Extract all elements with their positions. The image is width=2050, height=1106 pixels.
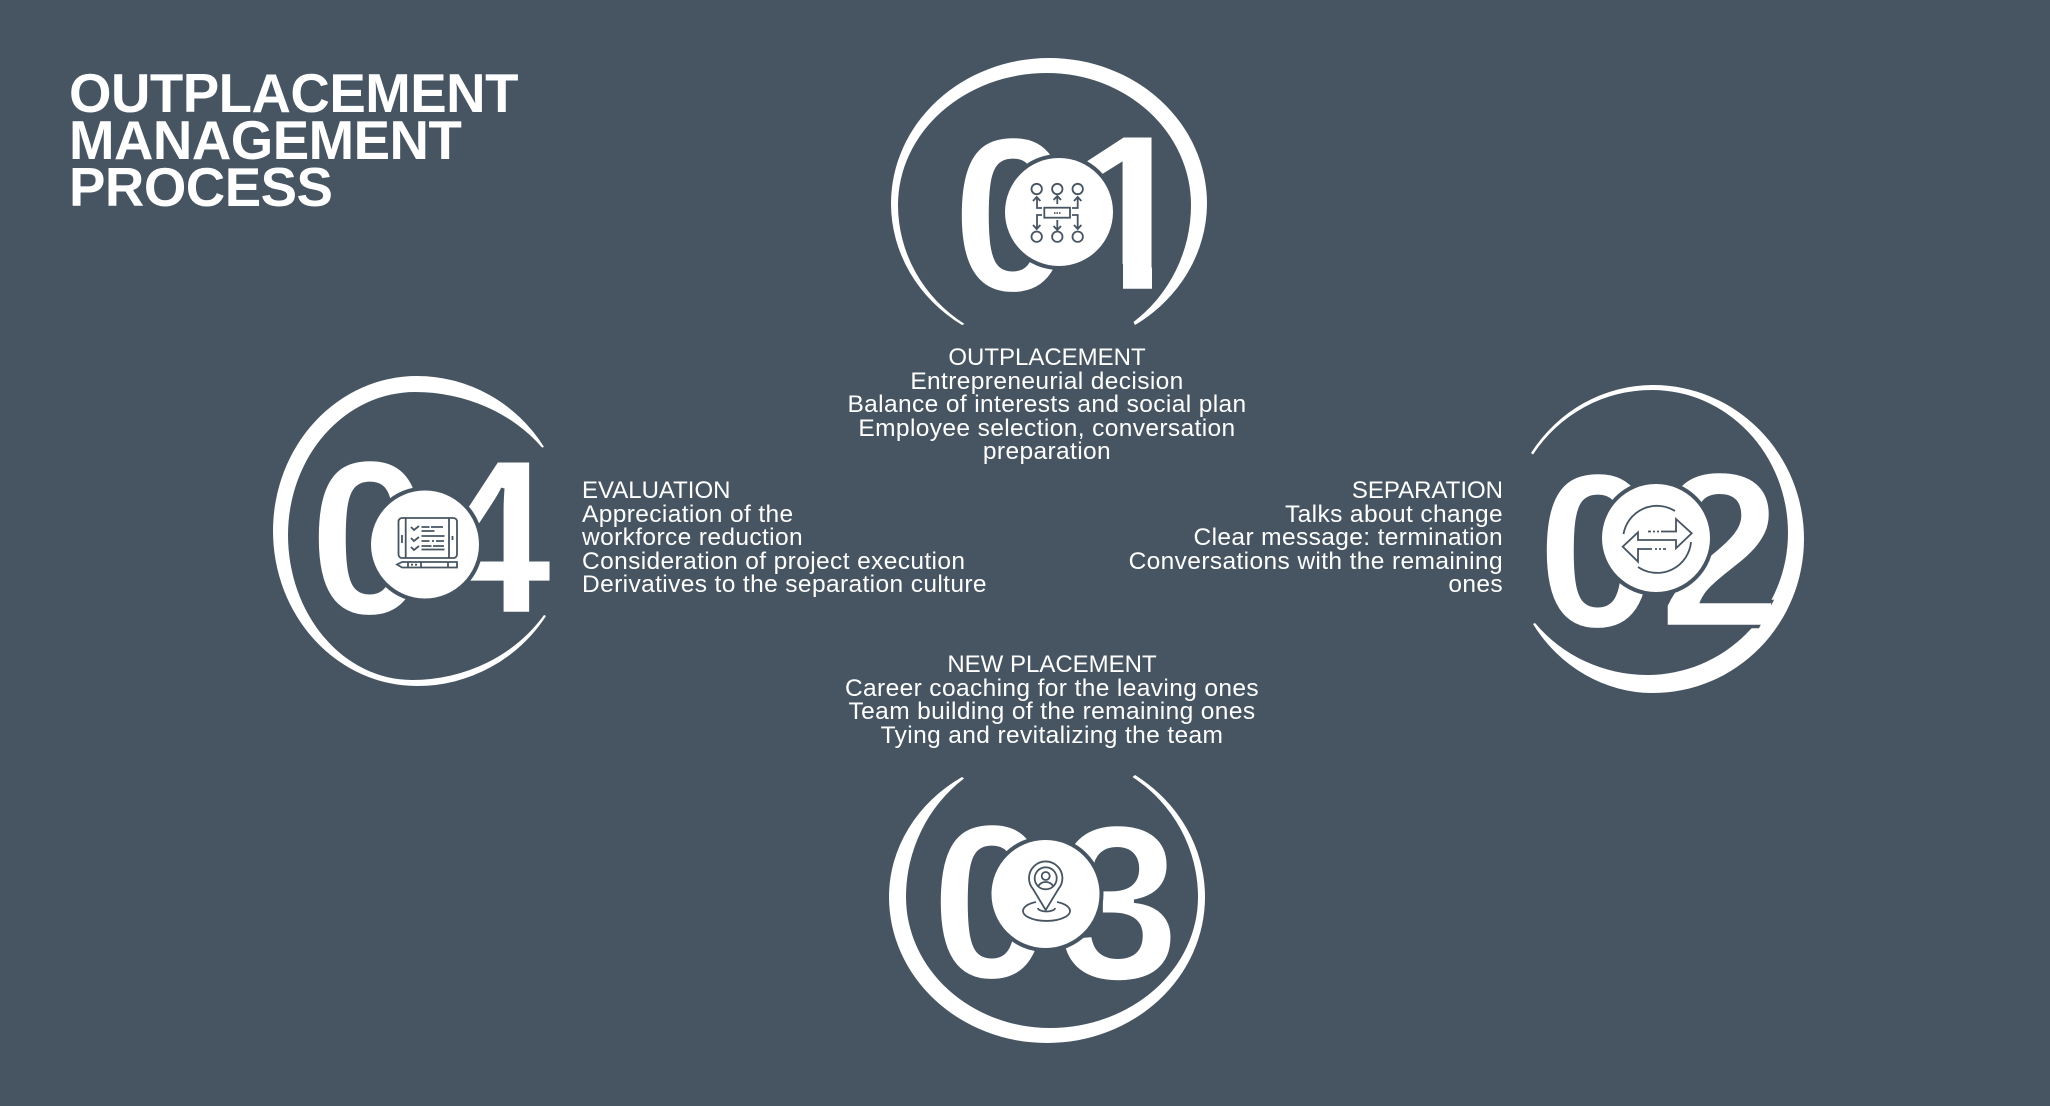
numeral 04: [308, 414, 552, 662]
numeral 04: 0: [308, 414, 432, 662]
badge 03: [889, 775, 1205, 1043]
icon: location pin with person: [1023, 861, 1070, 921]
numeral 03: [930, 778, 1180, 1028]
text block: separation: ones: [1448, 571, 1503, 598]
text block: evaluation: EVALUATION: [582, 477, 730, 504]
ring 01: [891, 58, 1207, 325]
icon disc 03: [988, 836, 1104, 952]
numeral 01: [962, 138, 1152, 292]
numeral 02: 2: [1658, 426, 1782, 674]
text block: separation: SEPARATION: [1352, 477, 1503, 504]
title: PROCESS: [69, 157, 332, 218]
text block: new placement: NEW PLACEMENT: [947, 651, 1157, 678]
numeral 01: 0: [951, 92, 1075, 340]
icon disc 02: [1598, 480, 1714, 596]
numeral 02: 0: [1536, 428, 1660, 676]
text block: new placement: [845, 651, 1259, 749]
text block: outplacement: [847, 344, 1247, 465]
text block: separation: [1129, 477, 1503, 598]
text block: evaluation: Derivatives to the separation culture: [582, 571, 987, 598]
icon disc 04: [367, 486, 483, 602]
ring 04: [273, 376, 546, 686]
icon: tablet checklist: [397, 518, 457, 568]
text block: outplacement: Employee selection, conversation: [858, 415, 1236, 442]
text block: outplacement: OUTPLACEMENT: [948, 344, 1146, 371]
title: OUTPLACEMENT: [69, 63, 518, 124]
ring 03: [889, 775, 1205, 1043]
icon: process map: [1032, 184, 1083, 242]
text block: evaluation: workforce reduction: [582, 524, 803, 551]
text block: new placement: Career coaching for the leaving ones: [845, 675, 1259, 702]
text block: evaluation: Consideration of project execution: [582, 548, 965, 575]
numeral 04: 4: [429, 414, 552, 662]
numeral 03: 0: [930, 778, 1054, 1026]
text block: outplacement: preparation: [983, 438, 1111, 465]
numeral 03: 3: [1057, 780, 1180, 1028]
badge 02: [1531, 385, 1804, 693]
text block: evaluation: Appreciation of the: [582, 501, 794, 528]
text block: new placement: Tying and revitalizing the team: [881, 722, 1223, 749]
text block: evaluation: [582, 477, 987, 598]
text block: separation: Talks about change: [1285, 501, 1503, 528]
numeral 02: [1546, 473, 1774, 628]
badge 01: [891, 58, 1207, 340]
text block: separation: Clear message: termination: [1194, 524, 1503, 551]
title: MANAGEMENT: [69, 110, 461, 171]
text block: outplacement: Balance of interests and social plan: [847, 391, 1247, 418]
numeral 01: 1: [1070, 90, 1193, 338]
title: [69, 63, 518, 218]
ring 02: [1531, 385, 1804, 693]
text block: separation: Conversations with the remaining: [1129, 548, 1503, 575]
text block: new placement: Team building of the remaining ones: [849, 698, 1255, 725]
icon: exchange arrows: [1623, 506, 1692, 573]
badge 04: [273, 376, 552, 686]
text block: outplacement: Entrepreneurial decision: [910, 368, 1184, 395]
icon disc 01: [1001, 154, 1117, 270]
